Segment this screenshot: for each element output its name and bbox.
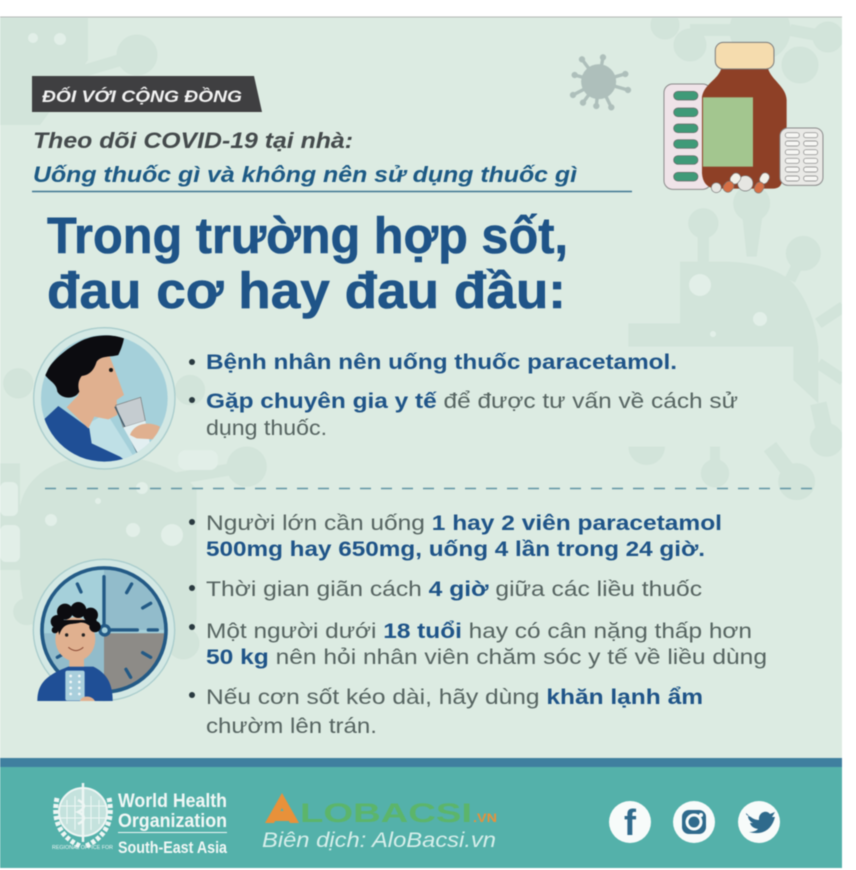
bullet points: group two: Một người dưới 18 tuổi hay có cân nặng thấp hơn xyxy=(206,619,752,643)
dashed divider xyxy=(45,488,820,490)
footer band xyxy=(0,758,842,868)
bullet points: group two: Nếu cơn sốt kéo dài, hãy dùng khăn lạnh ẩm xyxy=(206,685,703,709)
right large virus xyxy=(628,185,843,500)
bullet points: group one: Gặp chuyên gia y tế để được tư vấn về cách sử xyxy=(206,389,738,413)
subtitle: Uống thuốc gì và không nên sử dụng thuốc gì xyxy=(33,162,577,187)
main heading xyxy=(47,207,568,319)
logo: WHO: REGIONAL OFFICE FOR xyxy=(52,845,113,851)
logo: WHO: Organization xyxy=(118,811,227,832)
logo: AloBacsi xyxy=(262,793,497,852)
icon: Facebook: f xyxy=(624,802,637,843)
bottle body xyxy=(702,68,787,189)
tag: audience label: ĐỐI VỚI CỘNG ĐỒNG xyxy=(42,87,242,106)
bullet points: group one: dụng thuốc. xyxy=(206,416,327,440)
WHO emblem xyxy=(56,783,110,846)
bullet points: group one: Bệnh nhân nên uống thuốc paracetamol. xyxy=(206,350,677,374)
loose pills xyxy=(711,171,771,195)
bullet points: group two: chườm lên trán. xyxy=(206,714,377,738)
bullet points: group two: 50 kg nên hỏi nhân viên chăm sóc y tế về liều dùng xyxy=(206,645,767,669)
bottle label xyxy=(703,97,753,167)
icon: Twitter xyxy=(738,801,780,843)
bullet points: group one xyxy=(189,350,738,440)
background virus shapes xyxy=(0,0,843,673)
icon: man taking medicine xyxy=(34,328,175,470)
bullet points: group two: Thời gian giãn cách 4 giờ giữa các liều thuốc xyxy=(206,577,702,601)
left large virus xyxy=(0,368,267,673)
icon: clock and person with pills xyxy=(33,559,175,701)
top-right virus xyxy=(651,18,842,83)
logo: AloBacsi: LOBACSI xyxy=(300,798,472,828)
lighter gaps and bubbles xyxy=(0,33,767,562)
logo: AloBacsi: .VN xyxy=(473,811,497,825)
subtitle xyxy=(32,128,632,192)
right blister pack xyxy=(780,128,823,185)
person xyxy=(37,602,113,701)
small virus icon xyxy=(570,54,631,110)
logo: WHO xyxy=(52,783,227,857)
icon: Facebook xyxy=(609,801,651,843)
icon: medicine bottle and pills xyxy=(664,42,823,195)
logo: WHO: World Health xyxy=(118,791,227,812)
bullet points: group two: 500mg hay 650mg, uống 4 lần trong 24 giờ. xyxy=(206,537,705,561)
top edge line xyxy=(0,16,842,18)
bullet points: group two xyxy=(189,511,767,738)
subtitle: Theo dõi COVID-19 tại nhà: xyxy=(33,128,353,153)
bottle cap xyxy=(715,42,774,69)
clock hands and ticks xyxy=(57,577,157,677)
bullet points: group two: Người lớn cần uống 1 hay 2 viên paracetamol xyxy=(206,511,722,535)
left blister pack xyxy=(664,84,711,189)
tag: audience label xyxy=(32,76,262,112)
curly hair xyxy=(51,602,101,635)
icon: Instagram xyxy=(673,801,715,843)
main heading: Trong trường hợp sốt, xyxy=(47,207,568,264)
top-left virus xyxy=(0,18,157,125)
logo: WHO: South-East Asia xyxy=(118,838,227,857)
main heading: đau cơ hay đau đầu: xyxy=(47,262,566,319)
logo: AloBacsi: Biên dịch: AloBacsi.vn xyxy=(262,829,496,852)
